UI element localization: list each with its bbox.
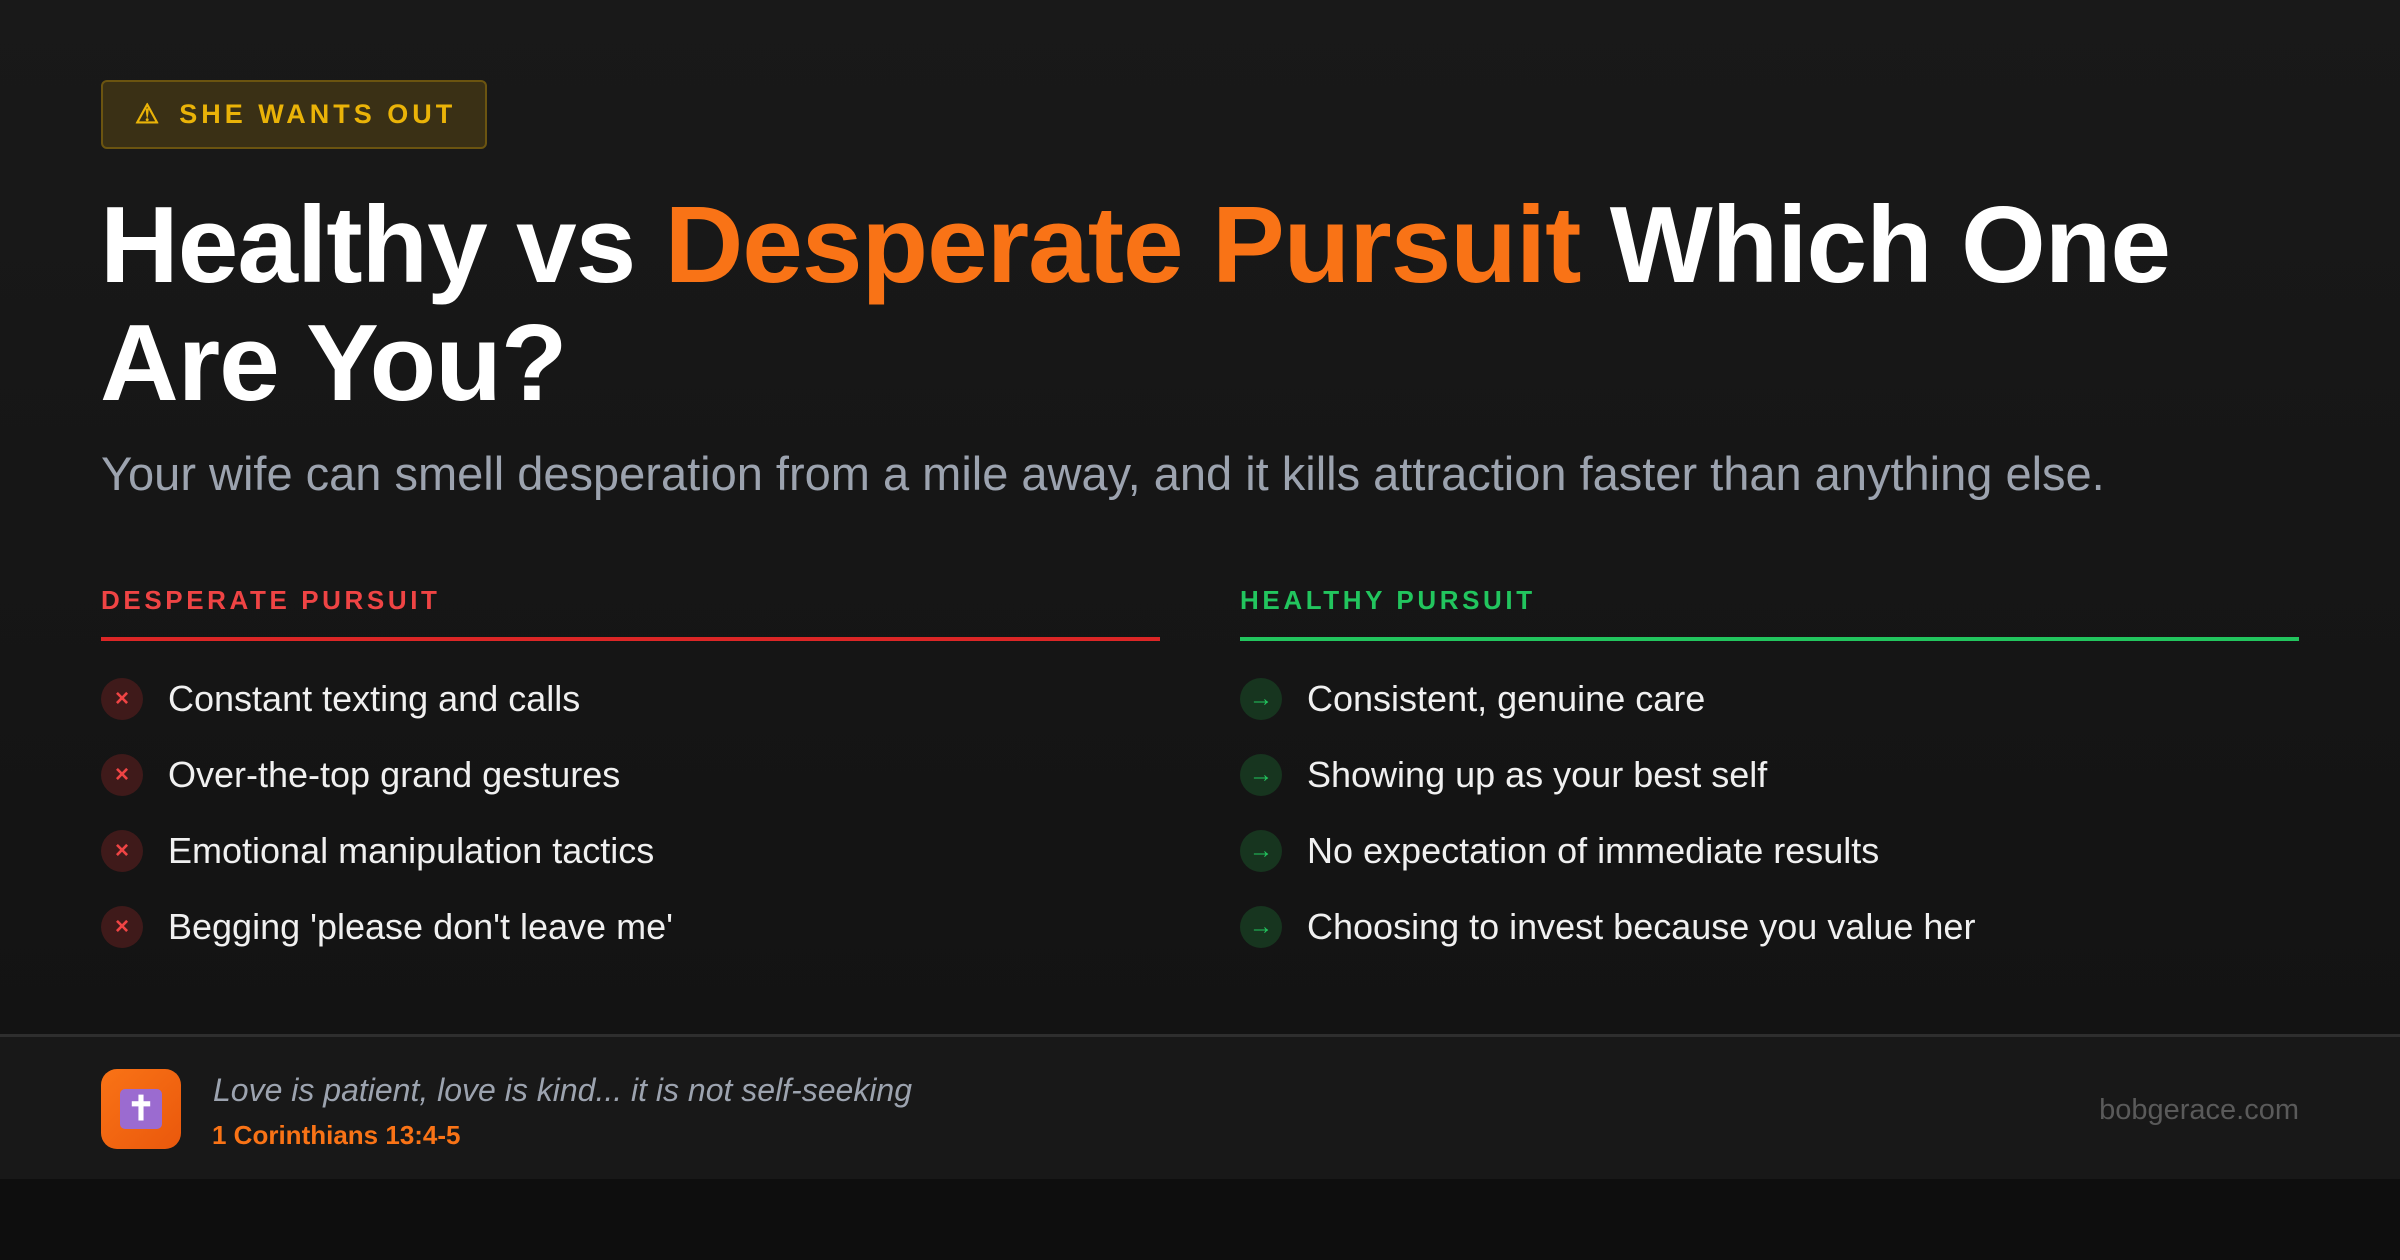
badge: ⚠ <box>135 99 163 129</box>
item: → <box>1249 837 1273 864</box>
panel: healthy pursuit <box>1240 585 2299 948</box>
title: Healthy vs Desperate Pursuit Which One Are You? <box>100 184 2170 424</box>
item: × <box>115 685 129 712</box>
item: → <box>1249 685 1273 712</box>
quote: Love is patient, love is kind... it is not self-seeking <box>213 1072 912 1108</box>
heading: healthy: HEALTHY PURSUIT <box>1240 585 1536 615</box>
panel: desperate pursuit <box>101 585 1160 948</box>
website: bobgerace.com <box>2099 1094 2299 1126</box>
item: → <box>1249 761 1273 788</box>
subtitle: Your wife can smell desperation from a mile away, and it kills attraction faster than anything else. <box>101 447 2105 500</box>
item: Constant texting and calls <box>168 678 580 719</box>
item: × <box>115 913 129 940</box>
item: → <box>1249 913 1273 940</box>
heading: desperate <box>101 585 1160 641</box>
icon: cross <box>101 1069 181 1149</box>
reference: 1 Corinthians 13:4-5 <box>212 1120 461 1150</box>
item: Showing up as your best self <box>1307 754 1767 795</box>
badge: SHE WANTS OUT <box>179 99 456 129</box>
item: No expectation of immediate results <box>1307 830 1879 871</box>
item: Over-the-top grand gestures <box>168 754 620 795</box>
item: × <box>115 761 129 788</box>
footer <box>0 1034 2400 1179</box>
icon: cross: ✝ <box>127 1090 155 1128</box>
heading: desperate: DESPERATE PURSUIT <box>101 585 441 615</box>
heading: healthy <box>1240 585 2299 641</box>
item: × <box>115 837 129 864</box>
item: Consistent, genuine care <box>1307 678 1705 719</box>
item: Choosing to invest because you value her <box>1307 906 1975 947</box>
item: Begging 'please don't leave me' <box>168 906 673 947</box>
item: Emotional manipulation tactics <box>168 830 654 871</box>
badge <box>101 80 487 149</box>
